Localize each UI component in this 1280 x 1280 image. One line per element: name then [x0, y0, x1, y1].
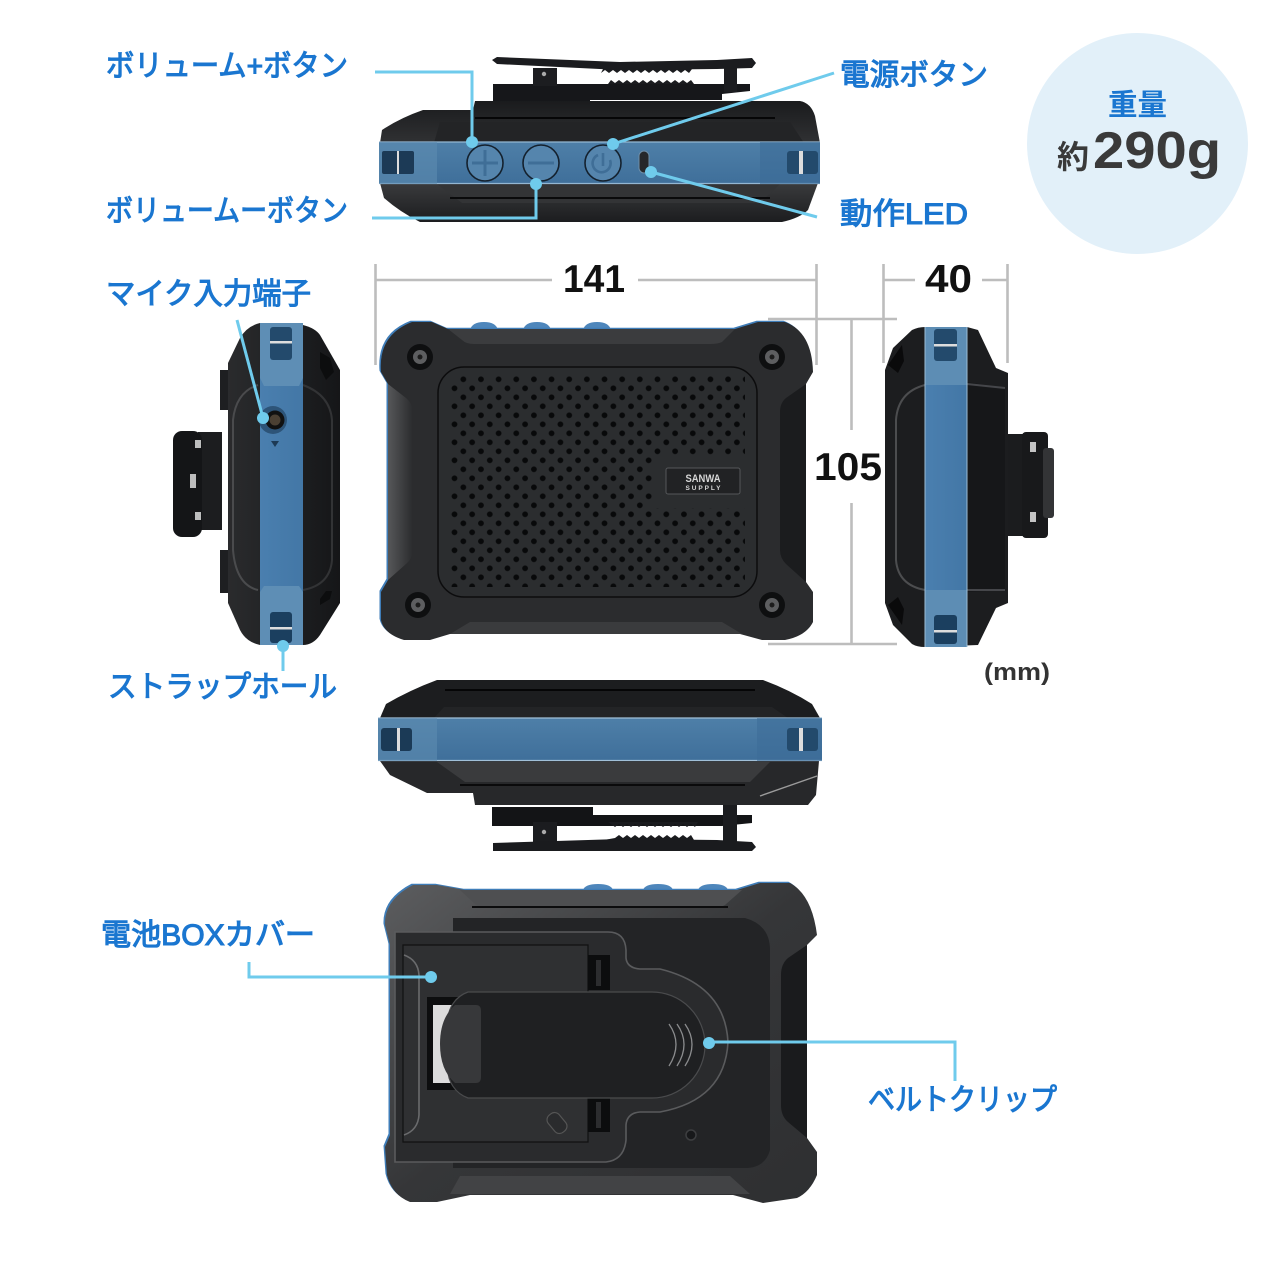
belt clip plate [440, 992, 705, 1098]
blue button tips [470, 322, 611, 330]
weight badge: 290g [1093, 122, 1221, 180]
left side view [173, 323, 340, 645]
strap slots (right) [934, 329, 957, 644]
upper housing [380, 101, 820, 143]
dimension: height 105: 105 [814, 446, 882, 489]
callout: strap hole [108, 640, 337, 704]
blue band (bottom) [378, 718, 822, 761]
LED [639, 151, 649, 173]
right grip [780, 384, 806, 582]
dimension: depth 40: 40 [925, 258, 972, 301]
callout: mic jack: マイク入力端子 [106, 278, 311, 311]
callout: volume minus button: ボリュームーボタン [106, 195, 348, 228]
back view with battery cover and clip [383, 882, 817, 1203]
dimension: height 105 [768, 319, 897, 644]
dimension: depth 40 [883, 258, 1008, 363]
dark back plate [453, 918, 770, 1168]
grille [438, 367, 757, 597]
callout: power button [607, 59, 988, 150]
clip knob (right) [1006, 432, 1054, 538]
callout: mic jack [106, 278, 311, 424]
strap slots [382, 151, 818, 174]
callout: power button: 電源ボタン [840, 59, 988, 92]
weight badge [1027, 33, 1248, 254]
Sanwa logo badge: SANWA [686, 473, 721, 485]
right side view [885, 327, 1054, 647]
callout: LED: 動作LED [840, 198, 968, 231]
left grip [388, 384, 413, 580]
weight badge: 約 [1057, 139, 1089, 175]
callout: volume plus button [106, 50, 478, 148]
strap slots (bottom) [381, 728, 818, 751]
callout: volume plus button: ボリューム+ボタン [106, 50, 348, 83]
weight badge: 重量 [1108, 89, 1167, 122]
callout: belt clip [703, 1037, 1057, 1117]
bottom grip [450, 622, 742, 634]
blue edge (back) [383, 882, 816, 1202]
callout: LED [645, 166, 968, 231]
battery box cover [403, 945, 610, 1142]
screws [405, 344, 785, 618]
callout: belt clip: ベルトクリップ [868, 1084, 1057, 1117]
power button [585, 145, 621, 181]
callout: strap hole: ストラップホール [108, 671, 337, 704]
callout: battery cover [101, 919, 437, 983]
plus button [467, 145, 503, 181]
minus button [523, 145, 559, 181]
blue edge [379, 321, 812, 639]
unit note: (mm) [984, 659, 1050, 686]
callout: volume minus button [106, 178, 542, 228]
blue button tips (back) [583, 884, 728, 890]
screw mark [686, 1130, 696, 1140]
strap slots (left) [270, 327, 292, 643]
dimension: width 141: 141 [563, 258, 625, 301]
blue band (left) [260, 323, 303, 645]
belt clip (top) [492, 57, 756, 102]
lower housing [380, 183, 818, 222]
front view with speaker grille [379, 321, 813, 640]
bottom view with belt clip [378, 680, 822, 851]
callout: battery cover: 電池BOXカバー [101, 919, 315, 952]
top view of speaker with belt clip [379, 57, 820, 222]
belt clip (bottom) [492, 805, 756, 851]
Sanwa logo badge [666, 468, 740, 494]
raised frame [395, 932, 728, 1162]
blue band (right) [925, 327, 967, 647]
Sanwa logo badge: SUPPLY [686, 485, 721, 492]
clip knob (left) [173, 370, 230, 593]
blue band [379, 142, 820, 184]
dimension: width 141 [375, 258, 816, 365]
top grip [448, 329, 735, 344]
mic jack [259, 406, 287, 447]
